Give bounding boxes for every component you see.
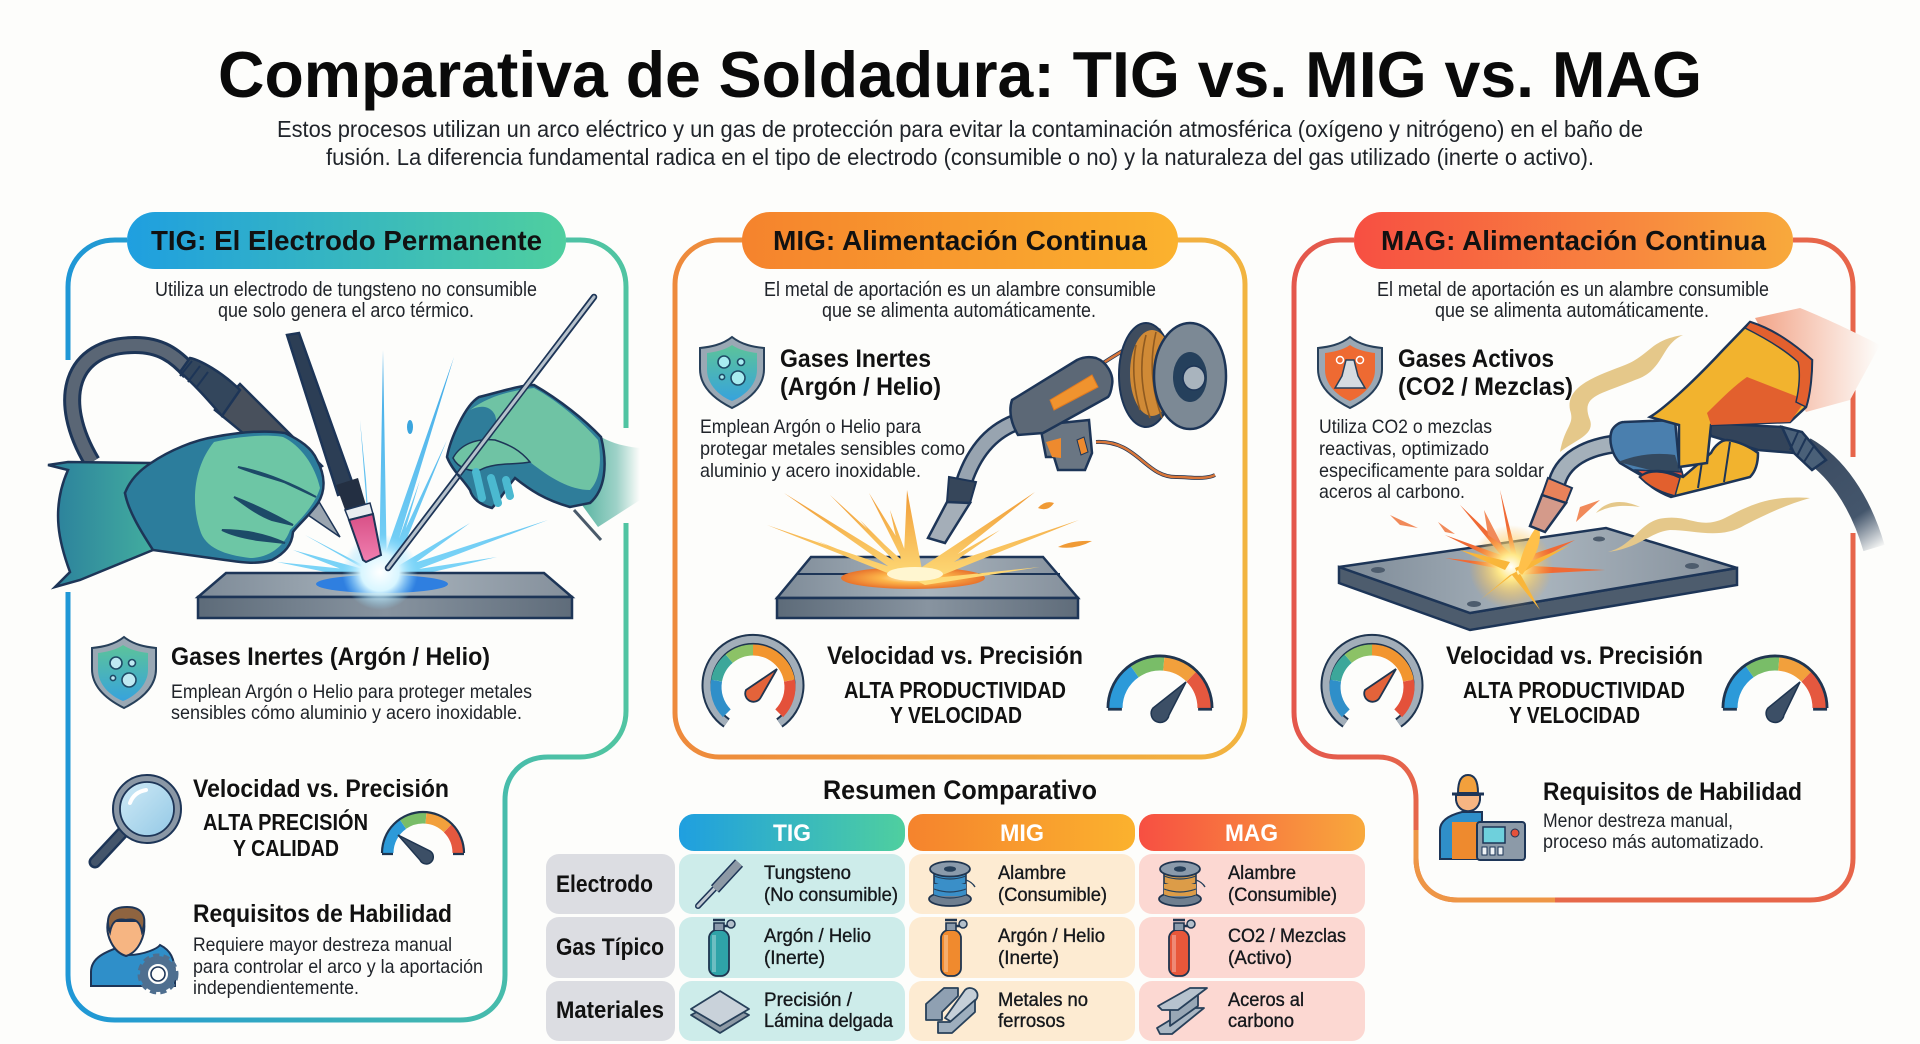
MIG gases block: protegar metales sensibles como bbox=[700, 438, 965, 460]
MIG speed block: Velocidad vs. Precisión bbox=[827, 642, 1083, 670]
icon: blue wire spool bbox=[929, 862, 975, 906]
MIG speed block: ALTA PRODUCTIVIDAD bbox=[844, 677, 1066, 703]
row: Gas Típico: (Activo) bbox=[1228, 948, 1292, 969]
icon: TIG shield bbox=[92, 637, 156, 708]
TIG welding illustration bbox=[48, 297, 640, 618]
MIG description bbox=[764, 279, 1156, 322]
MAG description: El metal de aportación es un alambre consumible bbox=[1377, 279, 1769, 301]
MAG gases block: Gases Activos bbox=[1398, 345, 1554, 373]
MAG description: que se alimenta automáticamente. bbox=[1435, 300, 1709, 322]
row: Materiales: ferrosos bbox=[998, 1011, 1065, 1032]
column header: MAG: MAG bbox=[1225, 820, 1278, 847]
TIG heading pill: TIG: El Electrodo Permanente bbox=[151, 225, 542, 256]
icon: MIG shield bbox=[700, 337, 764, 408]
subtitle: Estos procesos utilizan un arco eléctrico y un gas de protección para evitar la contaminación atmosférica (oxígeno y nitrógeno) en el baño de bbox=[277, 116, 1643, 142]
TIG speed block: Y CALIDAD bbox=[233, 835, 339, 861]
icon: metal blocks bbox=[926, 988, 978, 1033]
MIG description: que se alimenta automáticamente. bbox=[822, 300, 1096, 322]
MIG description: El metal de aportación es un alambre consumible bbox=[764, 279, 1156, 301]
row: Materiales: carbono bbox=[1228, 1011, 1294, 1032]
MAG gases block bbox=[1318, 337, 1573, 503]
row: Electrodo: (Consumible) bbox=[998, 885, 1107, 906]
icon: MAG left gauge bbox=[1326, 639, 1418, 723]
TIG speed block bbox=[95, 775, 464, 864]
MIG heading pill: MIG: Alimentación Continua bbox=[773, 225, 1147, 256]
icon: MAG right gauge bbox=[1723, 656, 1827, 722]
row: Electrodo: (Consumible) bbox=[1228, 885, 1337, 906]
icon: teal gas cylinder bbox=[709, 920, 735, 976]
MIG gases block: Emplean Argón o Helio para bbox=[700, 416, 921, 438]
icon: orange wire spool bbox=[1159, 862, 1205, 906]
row: Electrodo bbox=[546, 854, 1365, 914]
row: Materiales: Materiales bbox=[556, 997, 664, 1024]
row: Gas Típico: (Inerte) bbox=[998, 948, 1059, 969]
TIG gases block bbox=[92, 637, 532, 724]
row: Electrodo: Alambre bbox=[1228, 863, 1296, 884]
icon: worker with control panel bbox=[1440, 775, 1525, 860]
TIG skill block: independientemente. bbox=[193, 977, 359, 999]
MAG skill block: proceso más automatizado. bbox=[1543, 831, 1764, 853]
column header: MIG: MIG bbox=[1000, 820, 1044, 847]
MIG speed block: Y VELOCIDAD bbox=[890, 702, 1022, 728]
MIG welding illustration bbox=[767, 323, 1226, 618]
column header: MIG bbox=[908, 814, 1135, 851]
smoke wisps bbox=[1560, 335, 1810, 552]
MAG skill block: Menor destreza manual, bbox=[1543, 810, 1733, 832]
icon: person with gear bbox=[91, 907, 176, 992]
MIG heading pill bbox=[742, 212, 1178, 269]
row: Gas Típico: Gas Típico bbox=[556, 934, 664, 961]
MIG gases block: Gases Inertes bbox=[780, 345, 931, 373]
TIG description bbox=[155, 279, 537, 322]
TIG skill block: Requisitos de Habilidad bbox=[193, 900, 452, 928]
MAG speed block: Velocidad vs. Precisión bbox=[1446, 642, 1703, 670]
icon: TIG gauge bbox=[382, 812, 464, 864]
TIG speed block: ALTA PRECISIÓN bbox=[203, 808, 368, 835]
TIG skill block bbox=[91, 900, 483, 999]
MIG speed block bbox=[707, 639, 1212, 728]
row: Electrodo: Alambre bbox=[998, 863, 1066, 884]
MAG speed block: ALTA PRODUCTIVIDAD bbox=[1463, 677, 1685, 703]
TIG gases block: sensibles cómo aluminio y acero inoxidable. bbox=[171, 703, 522, 724]
MIG gases block bbox=[700, 337, 965, 482]
icon: MAG shield bbox=[1318, 337, 1382, 408]
MAG description bbox=[1377, 279, 1769, 322]
row: Materiales: Metales no bbox=[998, 990, 1088, 1011]
MAG gases block: aceros al carbono. bbox=[1319, 481, 1465, 503]
row: Materiales: Precisión / bbox=[764, 990, 853, 1011]
MAG speed block bbox=[1326, 639, 1827, 728]
icon: tungsten electrode bbox=[698, 863, 739, 906]
MIG gases block: (Argón / Helio) bbox=[780, 373, 941, 401]
row: Gas Típico bbox=[546, 917, 1365, 978]
MAG heading pill: MAG: Alimentación Continua bbox=[1381, 225, 1766, 256]
icon: red gas cylinder bbox=[1169, 920, 1195, 976]
row: Electrodo: (No consumible) bbox=[764, 885, 898, 906]
icon: steel beam bbox=[1157, 988, 1207, 1034]
icon: magnifier bbox=[95, 775, 181, 862]
MAG speed block: Y VELOCIDAD bbox=[1509, 702, 1640, 728]
TIG description: que solo genera el arco térmico. bbox=[218, 300, 474, 322]
MAG heading pill bbox=[1354, 212, 1793, 269]
icon: orange gas cylinder bbox=[941, 920, 967, 976]
TIG skill block: Requiere mayor destreza manual bbox=[193, 934, 452, 956]
column header: TIG: TIG bbox=[773, 820, 811, 847]
panel: MIG bbox=[675, 212, 1245, 757]
MAG gases block: especificamente para soldar bbox=[1319, 460, 1544, 482]
TIG skill block: para controlar el arco y la aportación bbox=[193, 956, 483, 978]
column header: MAG bbox=[1139, 814, 1365, 851]
TIG gases block: Gases Inertes (Argón / Helio) bbox=[171, 643, 490, 671]
subtitle bbox=[277, 116, 1643, 170]
MAG gases block: reactivas, optimizado bbox=[1319, 438, 1489, 460]
MAG skill block bbox=[1440, 775, 1802, 860]
icon: thin sheet bbox=[691, 991, 749, 1033]
TIG description: Utiliza un electrodo de tungsteno no consumible bbox=[155, 279, 537, 301]
TIG heading pill bbox=[127, 212, 566, 269]
MAG gases block: (CO2 / Mezclas) bbox=[1398, 373, 1573, 401]
column header: TIG bbox=[679, 814, 905, 851]
row: Electrodo: Electrodo bbox=[556, 871, 653, 898]
title: Comparativa de Soldadura: TIG vs. MIG vs. MAG bbox=[218, 38, 1702, 111]
row: Materiales bbox=[546, 981, 1365, 1041]
row: Electrodo: Tungsteno bbox=[764, 863, 851, 884]
row: Materiales: Aceros al bbox=[1228, 990, 1304, 1011]
MAG gases block: Utiliza CO2 o mezclas bbox=[1319, 416, 1492, 438]
row: Materiales: Lámina delgada bbox=[764, 1011, 893, 1032]
row: Gas Típico: (Inerte) bbox=[764, 948, 825, 969]
MAG skill block: Requisitos de Habilidad bbox=[1543, 778, 1802, 806]
MAG welding illustration bbox=[1339, 308, 1880, 630]
TIG gases block: Emplean Argón o Helio para proteger metales bbox=[171, 682, 532, 703]
MIG gases block: aluminio y acero inoxidable. bbox=[700, 460, 921, 482]
table heading: Resumen Comparativo bbox=[823, 775, 1097, 805]
icon: MIG right gauge bbox=[1108, 656, 1212, 722]
panel: TIG bbox=[48, 212, 640, 1020]
panel: MAG bbox=[1294, 212, 1880, 900]
subtitle: fusión. La diferencia fundamental radica en el tipo de electrodo (consumible o no) y la naturaleza del gas utilizado (inerte o activo). bbox=[326, 144, 1594, 170]
row: Gas Típico: CO2 / Mezclas bbox=[1228, 926, 1346, 947]
TIG speed block: Velocidad vs. Precisión bbox=[193, 775, 449, 803]
row: Gas Típico: Argón / Helio bbox=[764, 926, 871, 947]
row: Gas Típico: Argón / Helio bbox=[998, 926, 1105, 947]
comparison summary table bbox=[546, 775, 1365, 1041]
icon: MIG left gauge bbox=[707, 639, 799, 723]
